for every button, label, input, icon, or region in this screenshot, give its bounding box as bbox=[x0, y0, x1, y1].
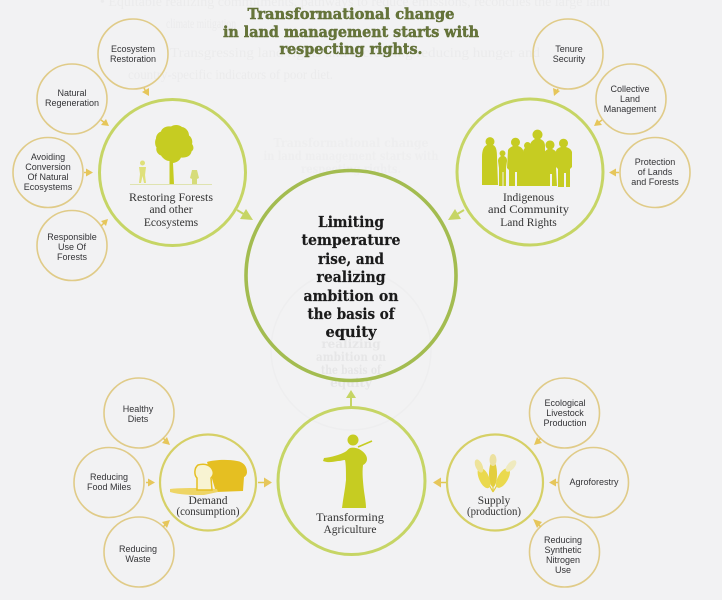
label: supply bbox=[467, 495, 521, 518]
arrow: collective to indigenous bbox=[594, 119, 602, 126]
central goal text: Limiting bbox=[318, 213, 384, 231]
central goal text: temperature bbox=[302, 231, 400, 249]
label: supply: Supply bbox=[478, 495, 511, 507]
arrow: agriculture to centre bbox=[346, 390, 356, 407]
faded background show-through: Transformational change bbox=[274, 136, 429, 150]
arrow: healthy to demand bbox=[162, 437, 170, 445]
icon: tree with figures bbox=[130, 125, 212, 184]
item: natural regeneration: Regeneration bbox=[45, 98, 99, 108]
arrow: tenure to indigenous bbox=[553, 88, 560, 96]
item: collective land management: Collective bbox=[610, 84, 650, 94]
central goal text: realizing bbox=[316, 268, 386, 286]
label: demand: Demand bbox=[189, 495, 228, 507]
item: agroforestry: Agroforestry bbox=[569, 477, 619, 487]
title bbox=[223, 5, 479, 58]
label: transforming agriculture: Transforming bbox=[316, 512, 384, 524]
icon: farmer with hoe bbox=[323, 434, 372, 508]
label: indigenous land rights: Indigenous bbox=[503, 192, 555, 204]
item: reducing synthetic nitrogen: Nitrogen bbox=[546, 555, 580, 565]
item: responsible use: Forests bbox=[57, 252, 87, 262]
icon: bread loaf bbox=[170, 460, 247, 495]
label: indigenous land rights: and Community bbox=[488, 204, 569, 216]
item: avoiding conversion: Conversion bbox=[25, 162, 71, 172]
label: transforming agriculture bbox=[316, 512, 384, 536]
item: natural regeneration: Natural bbox=[57, 88, 87, 98]
item: tenure security bbox=[533, 19, 603, 89]
arrow: food miles to demand bbox=[146, 478, 155, 486]
item: collective land management bbox=[596, 64, 666, 134]
item: avoiding conversion bbox=[13, 138, 83, 208]
item: responsible use: Responsible bbox=[47, 232, 97, 242]
faded background show-through: ambition on bbox=[316, 350, 386, 364]
item: avoiding conversion: Ecosystems bbox=[24, 182, 73, 192]
faded background show-through: equity bbox=[330, 376, 373, 390]
arrow: avoiding to forests bbox=[84, 168, 93, 176]
central goal text bbox=[302, 213, 400, 341]
item: protection of lands: and Forests bbox=[631, 177, 679, 187]
item: protection of lands: Protection bbox=[635, 157, 675, 167]
item: ecosystem restoration: Restoration bbox=[110, 54, 156, 64]
title: respecting rights. bbox=[280, 40, 422, 58]
arrow: waste to demand bbox=[162, 520, 170, 528]
item: healthy diets bbox=[104, 378, 174, 448]
item: reducing synthetic nitrogen: Reducing bbox=[544, 535, 582, 545]
arrow: agroforestry to supply bbox=[549, 478, 558, 486]
item: ecological livestock: Ecological bbox=[544, 398, 586, 408]
item: tenure security: Tenure bbox=[555, 44, 583, 54]
faded background show-through bbox=[100, 0, 610, 430]
icon: wheat bbox=[473, 454, 518, 492]
panel: demand bbox=[160, 434, 256, 530]
central goal text: the basis of bbox=[308, 305, 396, 323]
item: reducing food miles bbox=[74, 448, 144, 518]
item: reducing synthetic nitrogen bbox=[530, 517, 600, 587]
faded background show-through: Transgressing land rights and increasing reducing hunger and bbox=[170, 46, 540, 61]
label: restoring forests: and other bbox=[149, 204, 193, 216]
item: reducing synthetic nitrogen: Use bbox=[555, 565, 571, 575]
panel: restoring forests bbox=[100, 100, 246, 246]
item: ecosystem restoration: Ecosystem bbox=[111, 44, 155, 54]
central goal text: equity bbox=[326, 323, 378, 341]
faded background show-through: in land management starts with bbox=[264, 149, 439, 163]
arrow: regeneration to forests bbox=[101, 119, 109, 126]
label: restoring forests bbox=[129, 192, 214, 229]
label: demand bbox=[176, 495, 240, 518]
arrow: indigenous to centre bbox=[448, 209, 464, 220]
item: collective land management: Management bbox=[604, 104, 657, 114]
label: restoring forests: Restoring Forests bbox=[129, 192, 214, 204]
item: reducing waste: Waste bbox=[125, 554, 151, 564]
item: reducing food miles: Food Miles bbox=[87, 482, 132, 492]
item: reducing synthetic nitrogen: Synthetic bbox=[544, 545, 582, 555]
arrow: demand to agriculture bbox=[258, 478, 272, 488]
central goal text: ambition on bbox=[304, 287, 399, 305]
arrow: ecological to supply bbox=[534, 437, 542, 445]
item: agroforestry bbox=[558, 448, 628, 518]
faded background show-through: the basis of bbox=[321, 363, 382, 377]
item: protection of lands bbox=[620, 138, 690, 208]
label: transforming agriculture: Agriculture bbox=[323, 524, 377, 536]
item: reducing food miles: Reducing bbox=[90, 472, 128, 482]
item: reducing waste bbox=[104, 517, 174, 587]
item: ecosystem restoration bbox=[98, 19, 168, 89]
label: demand: (consumption) bbox=[176, 506, 240, 518]
faded background show-through: climate mitigation bbox=[166, 17, 236, 32]
item: healthy diets: Diets bbox=[128, 414, 149, 424]
faded background show-through: respecting rights. bbox=[301, 162, 401, 176]
arrow: supply to agriculture bbox=[433, 478, 446, 488]
faded background show-through: realizing bbox=[321, 337, 381, 351]
label: indigenous land rights bbox=[488, 192, 569, 229]
central goal text: rise, and bbox=[318, 250, 384, 268]
label: supply: (production) bbox=[467, 506, 521, 518]
label: restoring forests: Ecosystems bbox=[144, 217, 199, 229]
item: healthy diets: Healthy bbox=[123, 404, 154, 414]
arrow: nitrogen to supply bbox=[533, 519, 542, 528]
arrow: responsible to forests bbox=[101, 219, 108, 226]
item: tenure security: Security bbox=[553, 54, 586, 64]
panel: transforming agriculture bbox=[278, 408, 425, 554]
arrow: forests to centre bbox=[237, 209, 253, 220]
item: collective land management: Land bbox=[620, 94, 640, 104]
panel: indigenous land rights bbox=[457, 99, 603, 245]
item: protection of lands: of Lands bbox=[638, 167, 673, 177]
panel: central goal bbox=[246, 170, 456, 380]
faded background show-through: country-specific indicators of poor diet. bbox=[128, 68, 333, 83]
item: ecological livestock: Livestock bbox=[546, 408, 584, 418]
arrow: ecosystem to forests bbox=[142, 88, 149, 96]
label: indigenous land rights: Land Rights bbox=[500, 217, 557, 229]
panel: supply bbox=[447, 434, 543, 530]
item: avoiding conversion: Of Natural bbox=[27, 172, 69, 182]
item: ecological livestock: Production bbox=[543, 418, 587, 428]
icon: group of people bbox=[482, 130, 572, 187]
item: avoiding conversion: Avoiding bbox=[31, 152, 65, 162]
item: ecological livestock bbox=[530, 378, 600, 448]
item: responsible use: Use Of bbox=[58, 242, 86, 252]
title: in land management starts with bbox=[223, 23, 479, 41]
item: responsible use bbox=[37, 210, 107, 280]
arrow: protection to indigenous bbox=[609, 168, 619, 176]
item: natural regeneration bbox=[37, 64, 107, 134]
item: reducing waste: Reducing bbox=[119, 544, 157, 554]
title: Transformational change bbox=[248, 5, 454, 23]
